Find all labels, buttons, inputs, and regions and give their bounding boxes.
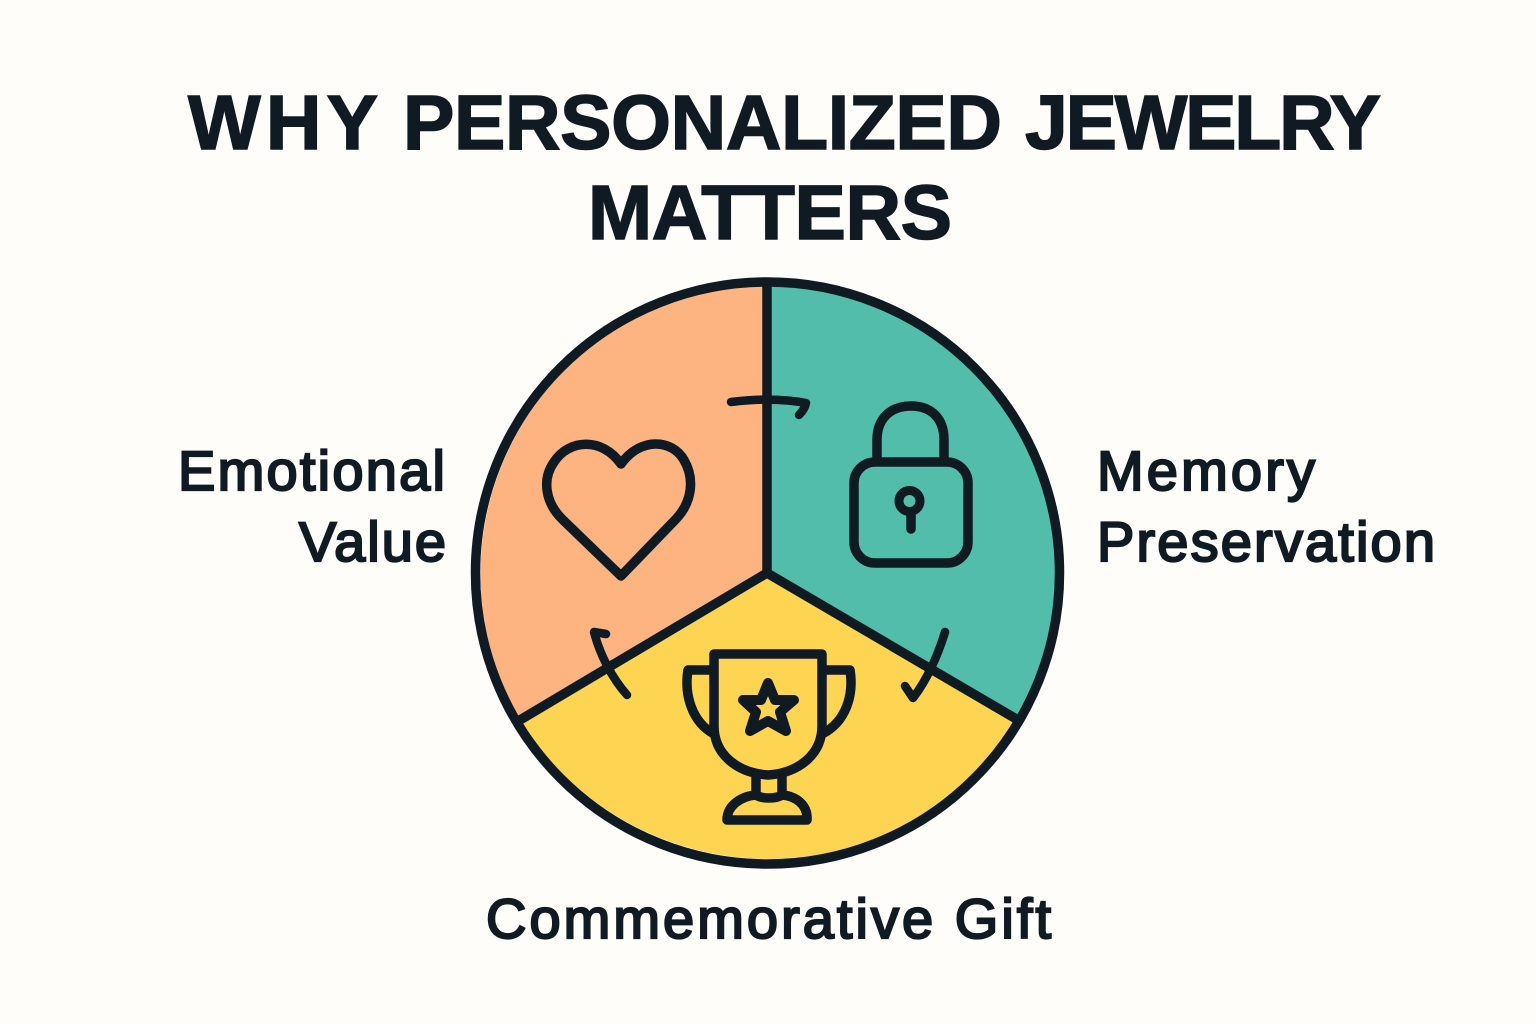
icon: heart xyxy=(547,444,691,576)
label: emotional value: Emotional xyxy=(178,439,445,502)
label: memory preservation: Memory xyxy=(1097,439,1315,502)
label: memory preservation xyxy=(1097,439,1435,573)
segment: memory preservation xyxy=(767,283,1057,720)
segment: commemorative gift xyxy=(520,573,1018,859)
segment: emotional value xyxy=(481,283,767,720)
title xyxy=(188,80,1381,256)
pie chart xyxy=(476,282,1060,864)
label: emotional value: Value xyxy=(299,510,446,573)
arrow: top connector xyxy=(731,400,806,415)
label: emotional value xyxy=(178,439,446,573)
title: PERSONALIZED xyxy=(403,80,1002,166)
pie outline and dividers xyxy=(476,282,1060,864)
title: WHY xyxy=(188,80,378,166)
title: JEWELRY xyxy=(1025,80,1381,166)
icon: trophy xyxy=(687,654,851,820)
label: memory preservation: Preservation xyxy=(1097,510,1435,573)
arrow: right connector xyxy=(905,632,945,698)
label: commemorative gift: Commemorative Gift xyxy=(486,887,1051,950)
arrow: left connector xyxy=(594,632,627,695)
title: MATTERS xyxy=(588,170,952,256)
icon: padlock xyxy=(854,406,968,563)
